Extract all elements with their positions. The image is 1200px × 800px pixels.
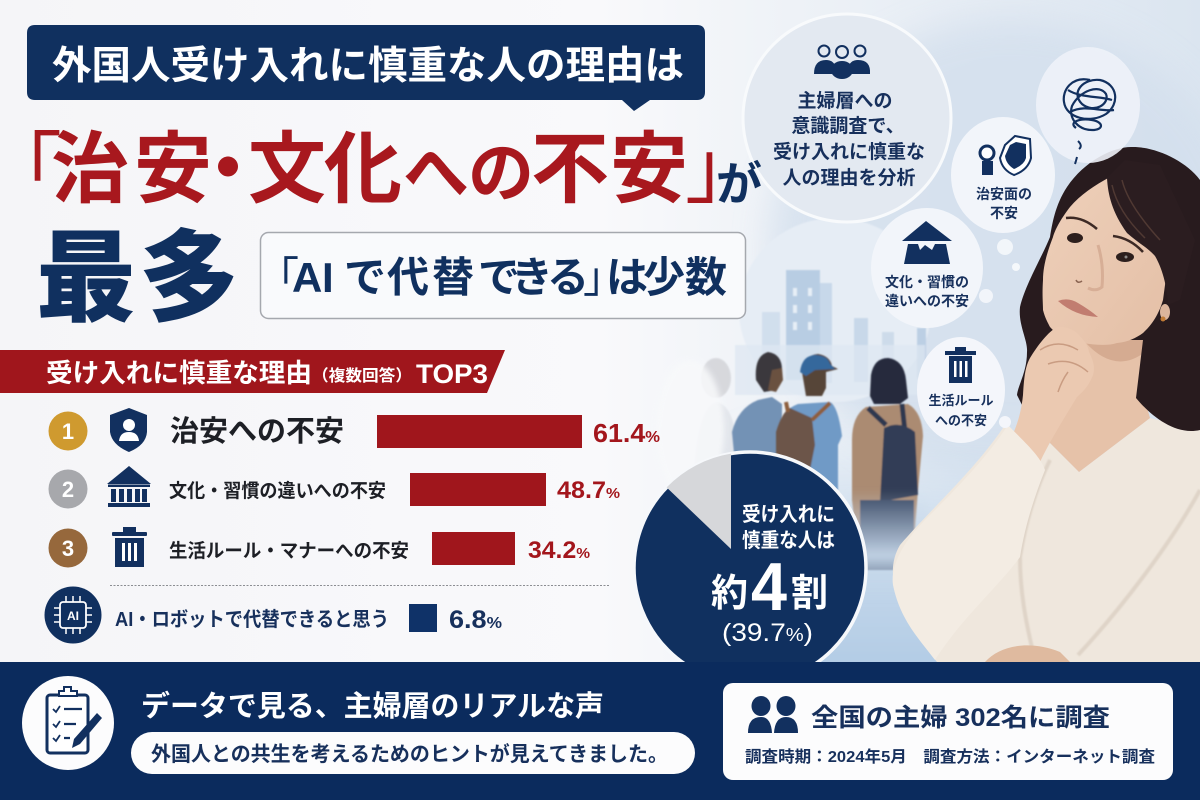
text: 39.7%: (39.7 %)	[722, 619, 813, 647]
text: cultural differences: 違いへの不安	[885, 293, 969, 309]
person: faded woman	[694, 358, 735, 480]
text: about 40%: 4	[751, 549, 787, 625]
sweater body	[893, 418, 1200, 662]
person: woman with dark backpack	[852, 358, 923, 570]
text: about 40%: 割	[791, 573, 828, 615]
text: people cautious about acceptance	[742, 503, 835, 552]
title banner	[27, 25, 705, 111]
thought bubble: security anxiety	[951, 117, 1055, 233]
icon: institution	[107, 466, 151, 507]
icon: AI chip	[44, 586, 102, 644]
person: man in blue shirt	[732, 352, 783, 480]
thought bubble: living rules	[917, 337, 1011, 443]
survey info card	[723, 683, 1173, 780]
value 6.8%: 6.8%	[449, 606, 502, 634]
value 61.4%: 61.4%	[593, 418, 660, 448]
section banner: TOP3: （複数回答）	[312, 366, 412, 385]
section banner: TOP3: TOP3	[416, 359, 488, 389]
label: AI・ロボットで代替できると思う	[115, 608, 389, 631]
text: security anxiety	[976, 186, 1032, 221]
text: survey description: 意識調査で、	[791, 114, 905, 137]
subheading pill: 外国人との共生を考えるためのヒントが見えてきました。	[151, 742, 668, 766]
rank badge 1	[48, 412, 88, 450]
fringe	[1107, 160, 1195, 305]
section banner: TOP3: 受け入れに慎重な理由	[46, 358, 312, 388]
footer band	[0, 662, 1200, 800]
neck and chest	[1040, 330, 1150, 472]
text: security anxiety: 治安面の	[976, 186, 1032, 202]
illustration: group of people from behind	[656, 352, 928, 600]
row 2: cultural differences	[48, 466, 620, 508]
text: survey description: 受け入れに慎重な	[773, 140, 925, 163]
text: living rules	[928, 393, 994, 428]
facial features	[1058, 218, 1143, 317]
text: people cautious about acceptance: 慎重な人は	[742, 529, 835, 552]
title banner: 外国人受け入れに慎重な人の理由は	[52, 45, 684, 88]
fog over legs	[848, 490, 928, 600]
icon: clipboard with pencil	[22, 676, 114, 770]
person: man with cap and backpack	[776, 354, 842, 490]
hand at chin	[1000, 327, 1094, 490]
rank badge 3: 3	[62, 536, 74, 561]
text: survey date and method: 調査時期：2024年5月 調査方法：インターネット調査	[745, 747, 1155, 766]
headline: anxiety about security and culture: が	[716, 158, 762, 210]
row 4: AI replacement	[44, 586, 502, 644]
illustration: hazy city skyline	[735, 218, 931, 402]
bar 48.7%	[410, 473, 546, 506]
icon: three people	[814, 46, 870, 79]
rank badge 2	[48, 470, 88, 508]
callout: AI replacement is minority: 「AIで代替できる」は少数	[257, 254, 727, 301]
value 48.7%: 48.7%	[557, 477, 620, 504]
bar 61.4%	[377, 415, 582, 448]
hair	[1017, 147, 1200, 431]
rank badge 2: 2	[62, 477, 74, 502]
text: living rules: への不安	[935, 413, 987, 428]
sleeve shading	[1020, 460, 1200, 660]
text: surveyed 302 housewives nationwide: 全国の主婦 302名に調査	[811, 704, 1110, 732]
ear and earring	[1160, 304, 1170, 322]
value 34.2%: 34.2%	[528, 537, 590, 564]
icon: trash can	[945, 347, 976, 383]
text: cultural differences	[885, 274, 969, 309]
forearm sleeve	[893, 425, 1045, 660]
thought bubble: tangled scribble	[1036, 47, 1140, 164]
icon: building with people	[902, 221, 952, 264]
speech bubble: survey description	[743, 14, 951, 222]
label: 文化・習慣の違いへの不安	[169, 479, 386, 502]
text: living rules: 生活ルール	[928, 393, 994, 408]
heading: データで見る、主婦層のリアルな声	[141, 689, 604, 723]
text: survey description: 人の理由を分析	[782, 167, 916, 189]
row 3: living rules	[48, 527, 590, 568]
text: about 40%: 約	[711, 573, 748, 615]
bar 34.2%	[432, 532, 515, 565]
text: people cautious about acceptance: 受け入れに	[742, 503, 835, 526]
face	[1043, 177, 1167, 345]
text: cultural differences: 文化・習慣の	[885, 274, 969, 290]
callout: AI replacement is minority	[257, 232, 746, 318]
headline: anxiety about security and culture: 「治安・文化への不安」	[0, 125, 763, 213]
section banner: TOP3	[0, 350, 505, 393]
illustration: thoughtful woman	[893, 147, 1200, 662]
headline: most common: 最多	[36, 223, 239, 335]
text: survey description	[773, 90, 925, 189]
rank badge 1: 1	[62, 419, 74, 444]
label: 生活ルール・マナーへの不安	[169, 540, 409, 562]
lower arm hand	[985, 645, 1070, 662]
label: 治安への不安	[170, 415, 344, 448]
pie chart: about 40% cautious	[634, 452, 866, 684]
text: about 40%	[711, 549, 828, 625]
row 1: security anxiety	[48, 408, 660, 452]
thought bubble: cultural differences	[871, 208, 1020, 328]
icon: shield and person	[980, 136, 1031, 175]
rank badge 3	[48, 528, 88, 568]
icon: shield	[110, 408, 147, 452]
icon: two people	[748, 696, 798, 733]
icon: trash can	[112, 527, 147, 567]
bar 6.8%	[409, 604, 437, 632]
text: survey description: 主婦層への	[797, 90, 893, 112]
text: security anxiety: 不安	[990, 205, 1018, 221]
icon: AI chip: AI	[67, 609, 79, 623]
subheading pill	[131, 732, 695, 774]
